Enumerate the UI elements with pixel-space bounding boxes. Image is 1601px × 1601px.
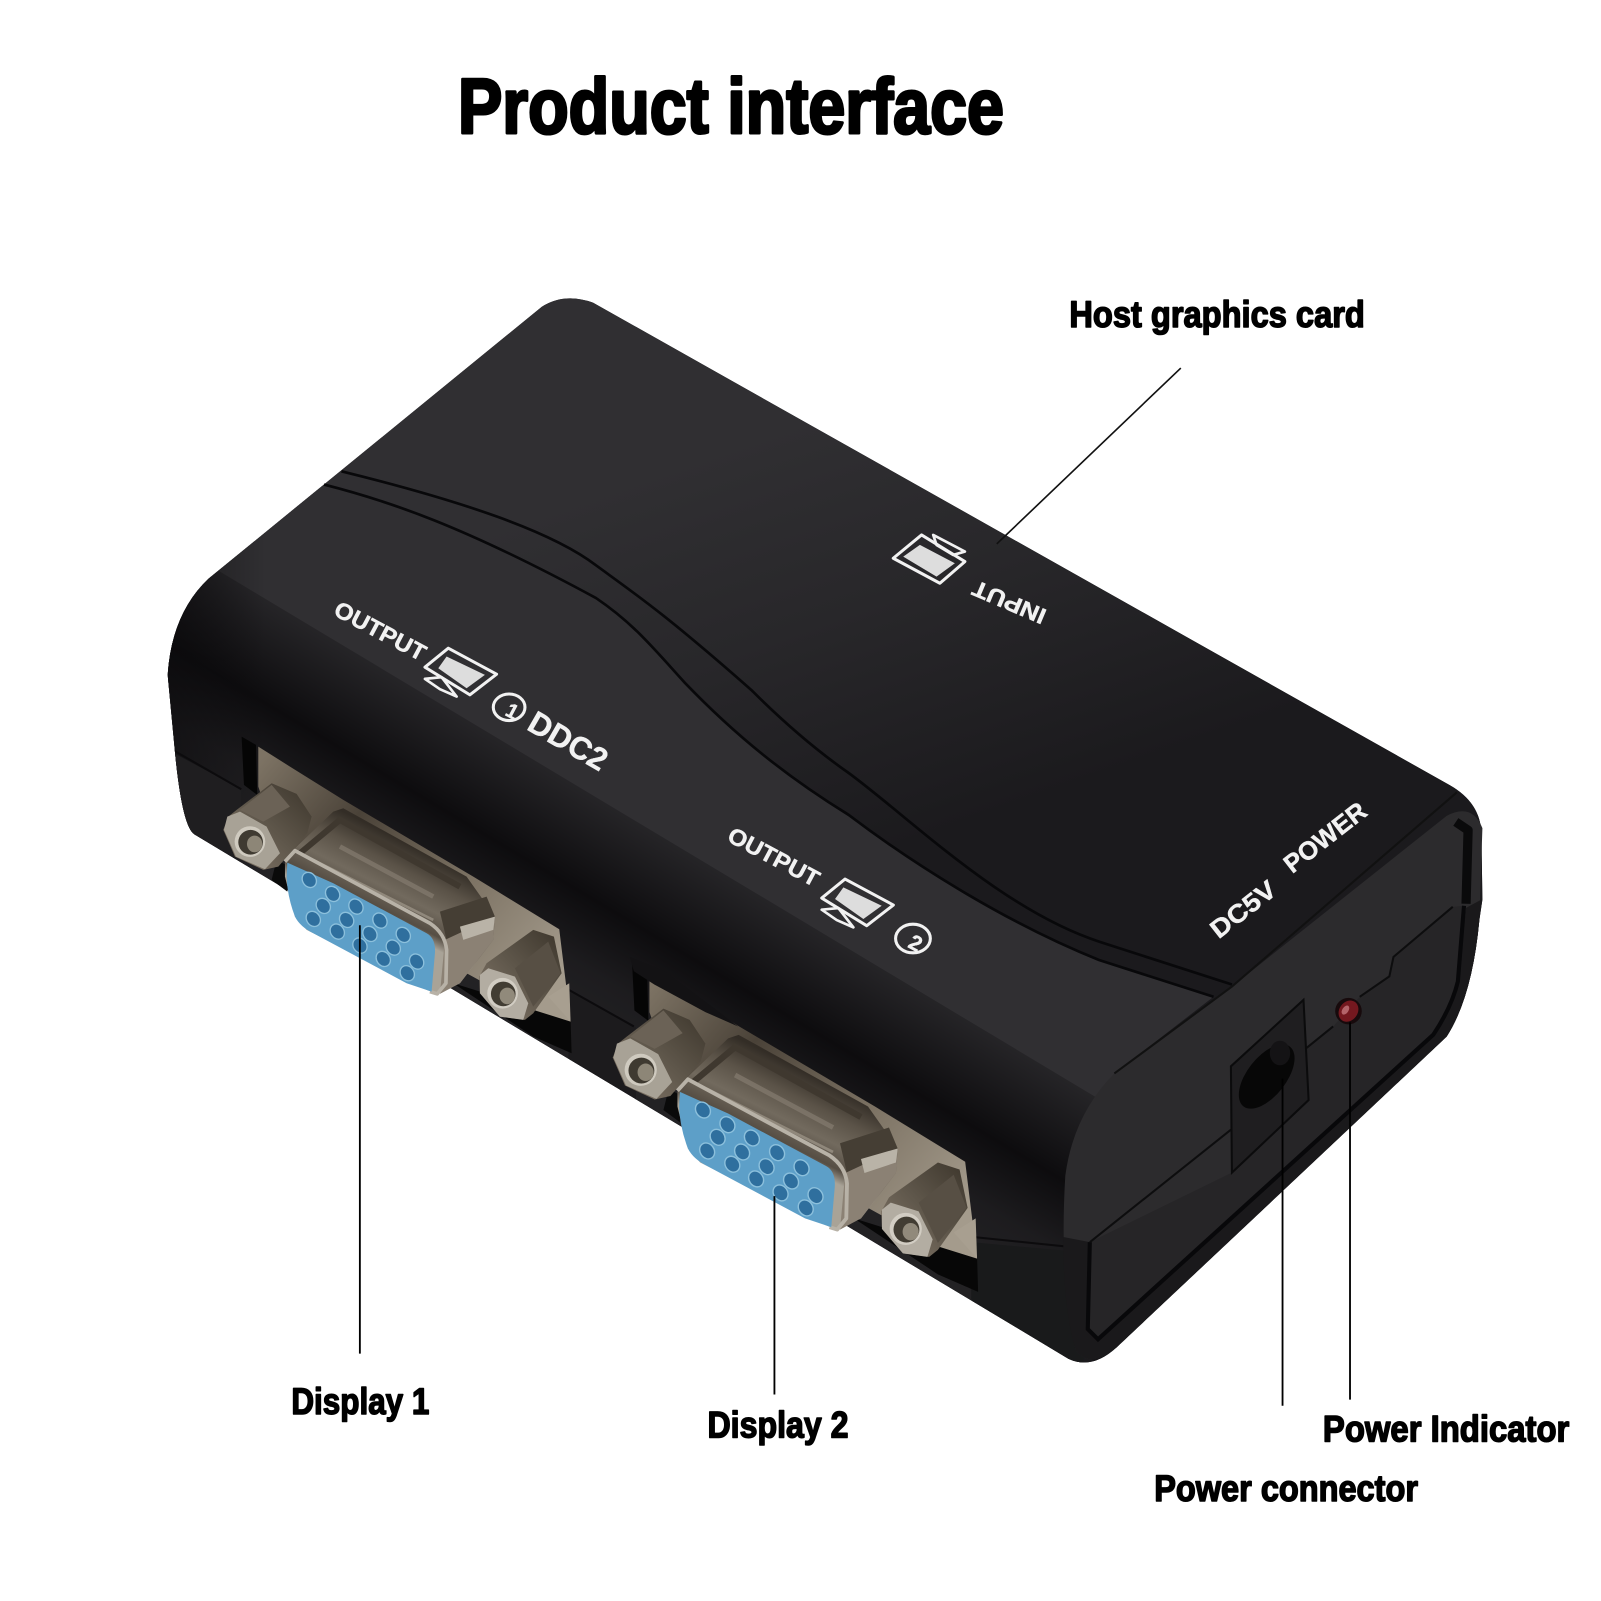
grooved wave line on top face [324, 471, 1232, 997]
text: DC5V POWER marking: POWER [1279, 797, 1372, 879]
label: Display 1: Display 1 [291, 1381, 429, 1422]
text: DC5V POWER marking [1205, 797, 1372, 944]
leader line: Power connector [1282, 1079, 1284, 1406]
icon: red power LED [1334, 997, 1362, 1026]
text: OUTPUT 1 marking with monitor icon, number and DDC2: DDC2 [522, 704, 614, 778]
label: Power Indicator: Power Indicator [1323, 1409, 1569, 1450]
text: OUTPUT 2 marking with monitor icon and number: OUTPUT [724, 822, 824, 892]
title: Product interface [458, 64, 1004, 150]
text: OUTPUT 2 marking with monitor icon and number [724, 822, 930, 957]
device: VGA splitter body [153, 286, 1503, 1380]
text: DC5V POWER marking: DC5V [1205, 876, 1282, 944]
connector: VGA port 2 [613, 957, 978, 1292]
leader line: Power Indicator [1349, 1022, 1351, 1400]
text: INPUT marking with monitor icon: INPUT [968, 575, 1050, 629]
leader line: Host graphics card [997, 368, 1181, 544]
label: Power connector: Power connector [1154, 1468, 1418, 1509]
text: OUTPUT 1 marking with monitor icon, number and DDC2: OUTPUT [330, 596, 431, 666]
leader line: Display 1 [359, 925, 361, 1354]
text: OUTPUT 1 marking with monitor icon, number and DDC2: 1 [502, 699, 523, 724]
text: OUTPUT 1 marking with monitor icon, number and DDC2 [330, 596, 614, 778]
text: OUTPUT 2 marking with monitor icon and number: 2 [904, 930, 926, 957]
label: Display 2: Display 2 [707, 1404, 849, 1445]
leader line: Display 2 [773, 1196, 775, 1394]
icon: power jack [1228, 1000, 1309, 1173]
label: Host graphics card: Host graphics card [1069, 294, 1365, 335]
connector: VGA port 1 [223, 737, 572, 1053]
text: INPUT marking with monitor icon [893, 535, 1050, 629]
end face with power side [1064, 811, 1482, 1359]
